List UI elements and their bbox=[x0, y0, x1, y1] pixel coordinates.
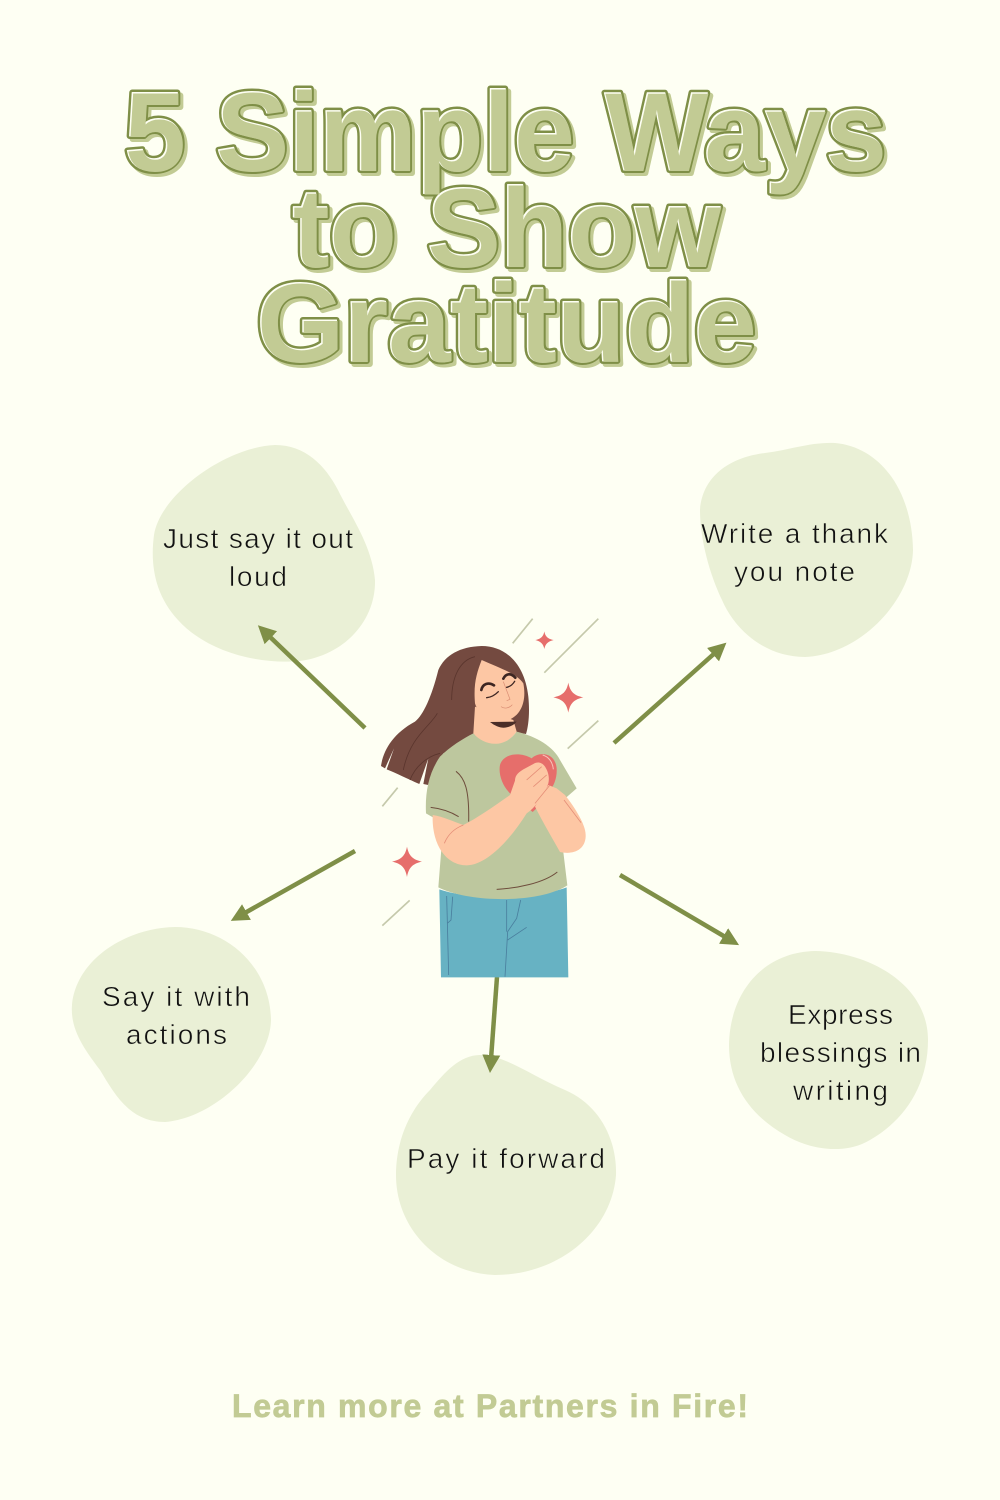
title: Gratitude bbox=[259, 263, 759, 388]
panel: say it with actions: actions bbox=[126, 1019, 227, 1050]
title: 5 Simple Ways bbox=[125, 70, 887, 195]
title bbox=[124, 69, 889, 388]
illustration: woman holding a heart bbox=[381, 619, 598, 977]
panel: write a thank you note: you note bbox=[734, 556, 855, 587]
pants bbox=[439, 887, 568, 977]
panel: just say it out loud: Just say it out bbox=[163, 523, 353, 554]
title: to Show bbox=[295, 168, 724, 293]
panel: write a thank you note: Write a thank bbox=[701, 518, 889, 549]
footer call to action: Learn more at Partners in Fire! bbox=[232, 1388, 748, 1424]
shirt bbox=[426, 732, 577, 899]
panel: just say it out loud: loud bbox=[229, 561, 287, 592]
title: Gratitude bbox=[257, 261, 757, 386]
icon: small sparkle bbox=[535, 631, 554, 649]
arrow: to write a thank you note bbox=[614, 652, 716, 743]
title: Gratitude bbox=[256, 260, 756, 385]
title: 5 Simple Ways bbox=[127, 72, 889, 197]
panel: pay it forward: Pay it forward bbox=[407, 1143, 605, 1174]
title: to Show bbox=[292, 165, 721, 290]
panel: express blessings in writing: blessings in bbox=[760, 1037, 921, 1068]
panel: say it with actions: Say it with bbox=[102, 981, 250, 1012]
title: 5 Simple Ways bbox=[124, 69, 886, 194]
icon: large sparkle bbox=[553, 683, 583, 713]
title: to Show bbox=[293, 166, 722, 291]
heart bbox=[500, 754, 557, 812]
face bbox=[475, 660, 524, 721]
icon: left sparkle bbox=[392, 847, 422, 877]
title: 5 Simple Ways bbox=[124, 69, 886, 194]
panel: write a thank you note bbox=[700, 443, 913, 657]
panel: pay it forward bbox=[396, 1055, 616, 1275]
arrow: to pay it forward bbox=[491, 977, 497, 1059]
title: to Show bbox=[292, 165, 721, 290]
panel: express blessings in writing: Express bbox=[788, 999, 893, 1030]
neck bbox=[473, 707, 517, 744]
right arm bbox=[535, 785, 586, 853]
hair bbox=[381, 646, 529, 785]
title: Gratitude bbox=[256, 260, 756, 385]
arrow: to just say it out loud bbox=[268, 635, 365, 728]
panel: express blessings in writing bbox=[729, 951, 928, 1149]
panel: express blessings in writing: writing bbox=[792, 1075, 888, 1106]
left arm and hands bbox=[433, 762, 549, 865]
panel: just say it out loud bbox=[153, 445, 375, 662]
arrow: to express blessings in writing bbox=[620, 875, 727, 938]
panel: say it with actions bbox=[72, 927, 271, 1122]
arrow: to say it with actions bbox=[243, 851, 355, 914]
